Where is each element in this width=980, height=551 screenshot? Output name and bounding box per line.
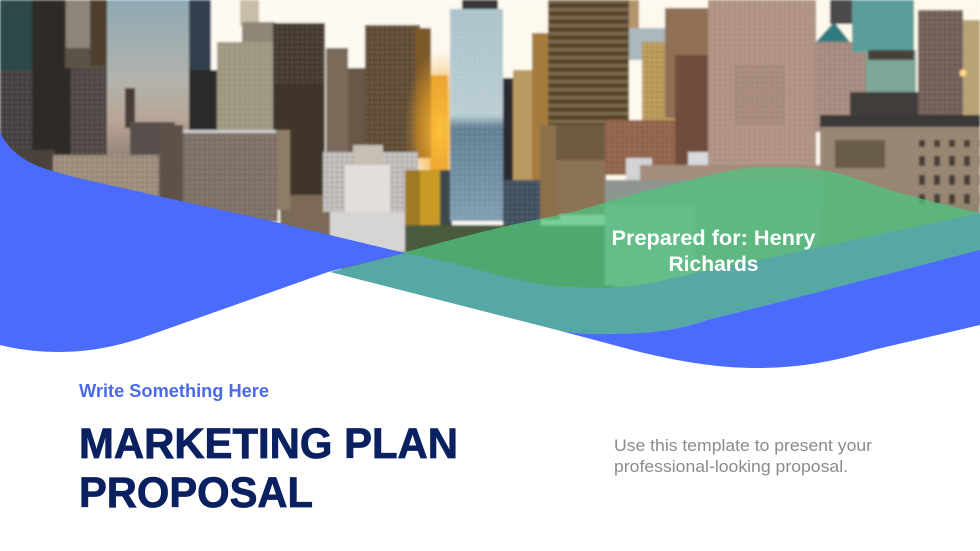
prepared-for label — [612, 227, 816, 276]
description text: Use this template to present your — [614, 436, 872, 455]
description text: professional-looking proposal. — [614, 457, 848, 476]
prepared-for label: Prepared for: Henry — [612, 227, 816, 250]
teal wave — [330, 213, 980, 334]
city skyline photo — [0, 0, 980, 310]
prepared-for label: Richards — [668, 253, 758, 276]
main title — [79, 420, 458, 517]
green translucent wave — [405, 167, 980, 290]
eyebrow text: Write Something Here — [79, 381, 269, 401]
main title: PROPOSAL — [79, 469, 313, 517]
description text — [614, 436, 872, 476]
blue wave right — [557, 250, 980, 368]
blue wave left — [0, 132, 405, 352]
main title: MARKETING PLAN — [79, 420, 458, 468]
